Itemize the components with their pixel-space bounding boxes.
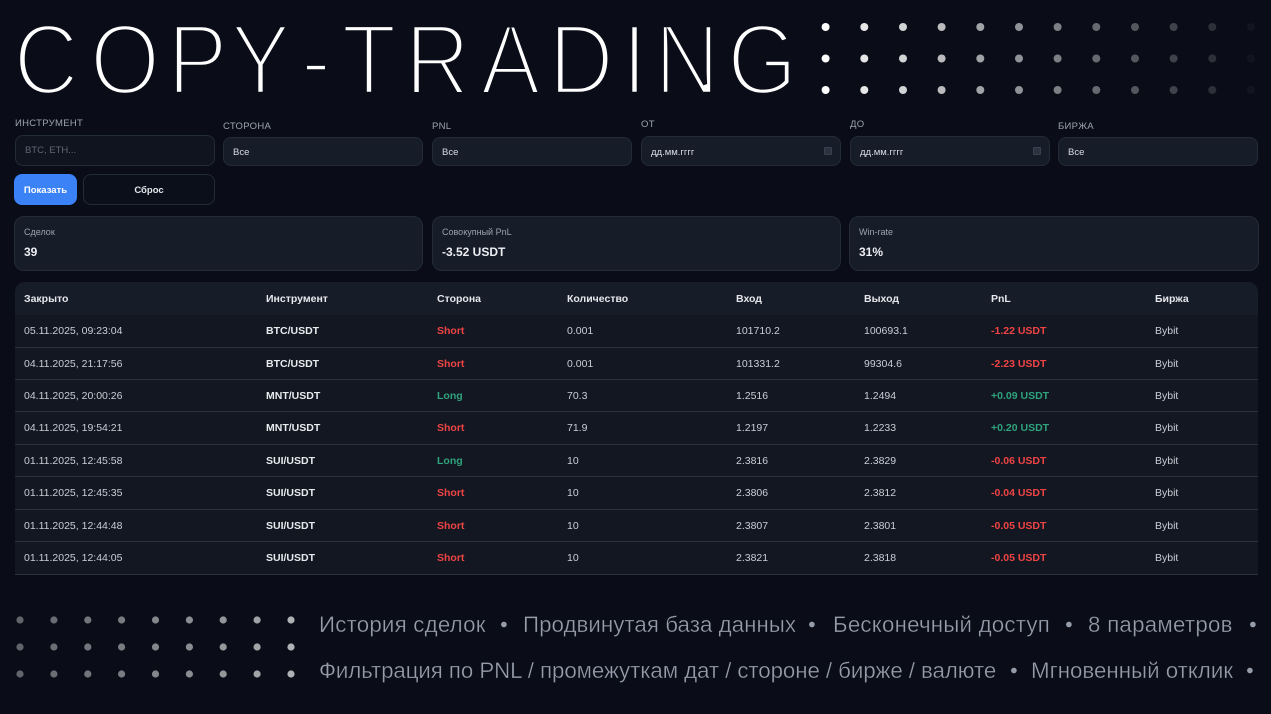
- stat card: total pnl: -3.52 USDT: [442, 245, 505, 259]
- row 3: MNT/USDT: [266, 390, 320, 402]
- row 1: BTC/USDT: [266, 325, 319, 337]
- feature line 1: •: [808, 612, 816, 637]
- feature line 2: •: [1010, 658, 1018, 683]
- row 4: 04.11.2025, 19:54:21: [24, 422, 122, 434]
- table header: Вход: [736, 293, 762, 305]
- row 5: 2.3829: [864, 455, 896, 467]
- filter: instrument: ИНСТРУМЕНТ: [15, 118, 83, 129]
- row 6: Bybit: [1155, 487, 1178, 499]
- feature line 2: Фильтрация по PNL / промежуткам дат / стороне / бирже / валюте: [319, 658, 996, 683]
- filter: date to: ДО: [850, 119, 864, 130]
- row 5: -0.06 USDT: [991, 455, 1046, 467]
- row 6: 01.11.2025, 12:45:35: [24, 487, 122, 499]
- row 7: SUI/USDT: [266, 520, 315, 532]
- row 7: -0.05 USDT: [991, 520, 1046, 532]
- filter: pnl: PNL: [432, 121, 451, 132]
- row 1: 05.11.2025, 09:23:04: [24, 325, 122, 337]
- row 2: 04.11.2025, 21:17:56: [24, 358, 122, 370]
- table header: Выход: [864, 293, 899, 305]
- table header: Инструмент: [266, 293, 328, 305]
- filter: instrument: BTC, ETH...: [25, 145, 76, 156]
- filter: instrument: [15, 118, 215, 166]
- row 3: Long: [437, 390, 463, 402]
- row 7: 2.3807: [736, 520, 768, 532]
- row 1: 101710.2: [736, 325, 780, 337]
- stat card: trades: 39: [24, 245, 37, 259]
- row 4: 1.2197: [736, 422, 768, 434]
- feature line 1: 8 параметров: [1088, 612, 1233, 637]
- row 1: 0.001: [567, 325, 593, 337]
- row 3: Bybit: [1155, 390, 1178, 402]
- feature line 2: •: [1246, 658, 1254, 683]
- bottom dot grid: [16, 616, 295, 678]
- trades table: [15, 282, 1258, 575]
- row 2: -2.23 USDT: [991, 358, 1046, 370]
- feature line 2: Мгновенный отклик: [1031, 658, 1233, 683]
- row 2: BTC/USDT: [266, 358, 319, 370]
- row 1: [15, 315, 1258, 348]
- filter: date from: [641, 119, 841, 166]
- row 2: Bybit: [1155, 358, 1178, 370]
- filter: pnl: [432, 121, 632, 166]
- table header: Биржа: [1155, 293, 1189, 305]
- row 8: 2.3821: [736, 552, 768, 564]
- filter: date from: дд.мм.гггг: [651, 147, 694, 158]
- stat card: total pnl: [432, 216, 841, 271]
- row 3: [15, 380, 1258, 412]
- row 6: 2.3812: [864, 487, 896, 499]
- row 4: +0.20 USDT: [991, 422, 1049, 434]
- table header: Количество: [567, 293, 628, 305]
- feature line 1: •: [1065, 612, 1073, 637]
- stat card: win rate: Win-rate: [859, 227, 893, 237]
- row 5: 10: [567, 455, 579, 467]
- table header: [15, 282, 1258, 315]
- row 1: Short: [437, 325, 464, 337]
- button: show: [14, 174, 77, 205]
- row 8: [15, 542, 1258, 575]
- button: show: Показать: [24, 185, 67, 196]
- row 3: 1.2494: [864, 390, 896, 402]
- row 5: [15, 445, 1258, 477]
- button: reset: Сброс: [134, 185, 164, 196]
- feature line 1: Продвинутая база данных: [523, 612, 796, 637]
- row 8: Short: [437, 552, 464, 564]
- row 4: Short: [437, 422, 464, 434]
- row 8: 2.3818: [864, 552, 896, 564]
- table header: PnL: [991, 293, 1011, 305]
- row 7: 01.11.2025, 12:44:48: [24, 520, 122, 532]
- feature line 1: [319, 612, 1257, 637]
- button: reset: [83, 174, 215, 205]
- row 5: Long: [437, 455, 463, 467]
- filter: date to: дд.мм.гггг: [860, 147, 903, 158]
- feature line 1: История сделок: [319, 612, 486, 637]
- stat card: trades: [14, 216, 423, 271]
- table header: Закрыто: [24, 293, 68, 305]
- feature line 1: •: [500, 612, 508, 637]
- row 5: Bybit: [1155, 455, 1178, 467]
- row 8: 10: [567, 552, 579, 564]
- row 8: -0.05 USDT: [991, 552, 1046, 564]
- row 3: 1.2516: [736, 390, 768, 402]
- filter: exchange: [1058, 121, 1258, 166]
- row 1: 100693.1: [864, 325, 908, 337]
- row 4: [15, 412, 1258, 445]
- row 6: -0.04 USDT: [991, 487, 1046, 499]
- row 7: 10: [567, 520, 579, 532]
- row 4: 71.9: [567, 422, 587, 434]
- stat card: win rate: 31%: [859, 245, 883, 259]
- row 6: Short: [437, 487, 464, 499]
- top dot grid: [822, 23, 1216, 94]
- filter: date to: [850, 119, 1050, 166]
- row 7: 2.3801: [864, 520, 896, 532]
- row 5: SUI/USDT: [266, 455, 315, 467]
- row 8: SUI/USDT: [266, 552, 315, 564]
- row 7: [15, 510, 1258, 542]
- filter: exchange: Все: [1068, 147, 1084, 158]
- row 4: Bybit: [1155, 422, 1178, 434]
- filter: date from: ОТ: [641, 119, 655, 130]
- row 8: 01.11.2025, 12:44:05: [24, 552, 122, 564]
- row 3: 04.11.2025, 20:00:26: [24, 390, 122, 402]
- row 3: +0.09 USDT: [991, 390, 1049, 402]
- filter: side: СТОРОНА: [223, 121, 271, 132]
- row 5: 01.11.2025, 12:45:58: [24, 455, 122, 467]
- row 6: SUI/USDT: [266, 487, 315, 499]
- row 3: 70.3: [567, 390, 587, 402]
- row 1: Bybit: [1155, 325, 1178, 337]
- row 8: Bybit: [1155, 552, 1178, 564]
- feature line 1: •: [1249, 612, 1257, 637]
- row 6: [15, 477, 1258, 510]
- row 5: 2.3816: [736, 455, 768, 467]
- stat card: win rate: [849, 216, 1259, 271]
- row 2: Short: [437, 358, 464, 370]
- row 1: -1.22 USDT: [991, 325, 1046, 337]
- filter: exchange: БИРЖА: [1058, 121, 1094, 132]
- row 4: 1.2233: [864, 422, 896, 434]
- row 4: MNT/USDT: [266, 422, 320, 434]
- stat card: total pnl: Совокупный PnL: [442, 227, 512, 237]
- filter: side: Все: [233, 147, 249, 158]
- row 2: 99304.6: [864, 358, 902, 370]
- table header: Сторона: [437, 293, 481, 305]
- row 6: 2.3806: [736, 487, 768, 499]
- row 7: Short: [437, 520, 464, 532]
- filter: pnl: Все: [442, 147, 458, 158]
- row 7: Bybit: [1155, 520, 1178, 532]
- stat card: trades: Сделок: [24, 227, 55, 237]
- row 2: [15, 348, 1258, 380]
- row 6: 10: [567, 487, 579, 499]
- row 2: 0.001: [567, 358, 593, 370]
- row 2: 101331.2: [736, 358, 780, 370]
- feature line 1: Бесконечный доступ: [833, 612, 1050, 637]
- filter: side: [223, 121, 423, 166]
